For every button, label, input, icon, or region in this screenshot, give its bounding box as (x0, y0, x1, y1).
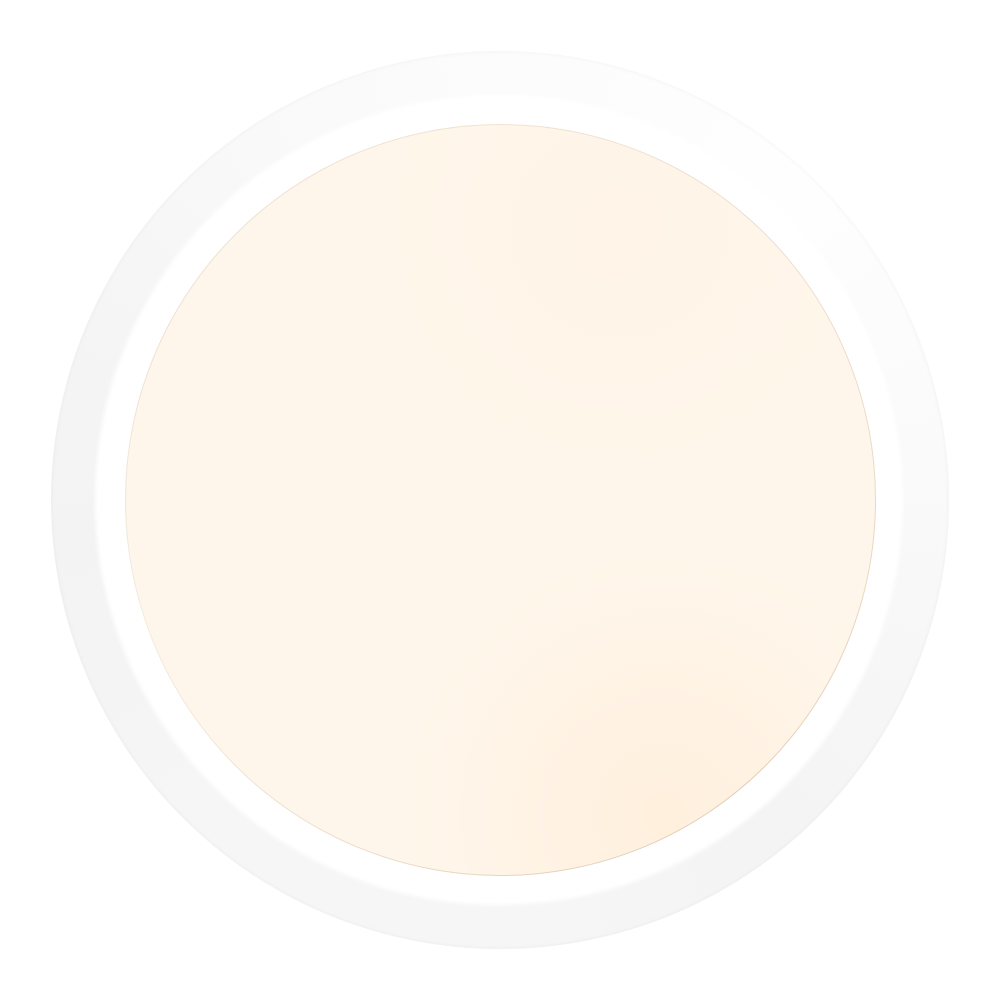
light diffuser (126, 125, 874, 874)
diffuser rim (124, 124, 876, 876)
lamp inner bezel (95, 95, 903, 905)
